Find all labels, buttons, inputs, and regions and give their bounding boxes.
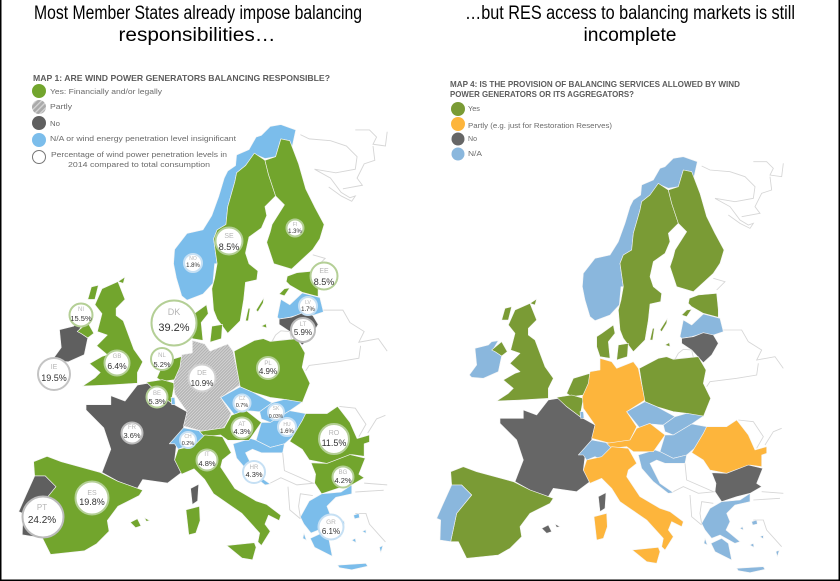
legend: map 4 [450, 79, 740, 160]
region: Italy [175, 435, 281, 560]
region: Iberia [437, 467, 560, 558]
bubble: FR: FR [128, 425, 137, 431]
bubble: LV: 1.7% [301, 307, 315, 313]
bubble: CH: CH [184, 434, 192, 440]
region: British Isles [53, 277, 143, 386]
bubble: FI: FI [293, 222, 297, 228]
legend: map 1: MAP 1: ARE WIND POWER GENERATORS BALANCING RESPONSIBLE? [33, 73, 330, 83]
region: Italy [583, 447, 683, 563]
bubble: SE: 8.5% [219, 242, 239, 252]
legend: map 1: 2014 compared to total consumption [68, 160, 210, 169]
map 4: balancing services allowed [437, 157, 783, 573]
bubble: FI: 1.3% [288, 229, 302, 235]
bubble: CZ: CZ [239, 396, 245, 402]
heading: left [34, 3, 362, 46]
bubble: GR: 6.1% [322, 527, 340, 536]
bubble: IT: 4.8% [198, 459, 216, 468]
bubble: BG: 4.2% [334, 476, 352, 485]
bubble: BG: BG [339, 470, 348, 476]
bubble: LT [291, 318, 315, 342]
bubble: AT: 4.3% [233, 427, 251, 436]
bubble: FR: 3.6% [123, 431, 141, 440]
bubble: BE [146, 386, 168, 408]
bubble: PT: 24.2% [28, 515, 56, 526]
region: Western Europe [86, 356, 199, 505]
bubble: IT [196, 450, 218, 470]
bubble: NI [70, 304, 92, 326]
bubble: GB: 6.4% [107, 361, 127, 371]
bubble: NI: NI [78, 307, 84, 313]
region: Central Europe [578, 357, 711, 493]
heading: left: responsibilities… [118, 25, 276, 46]
legend: map 1: Percentage of wind power penetration levels in [51, 150, 227, 159]
bubble: RO: 11.5% [322, 438, 346, 448]
region: South-East Europe [692, 420, 779, 573]
bubble: PL [257, 357, 279, 379]
region: Central Europe [169, 339, 310, 485]
bubble: HU [278, 418, 296, 436]
bubble: LV [299, 297, 317, 315]
bubble: EE: EE [319, 268, 329, 275]
bubble: DK: 39.2% [158, 322, 190, 334]
region: Baltics [277, 271, 323, 345]
bubble: PT [22, 496, 64, 538]
heading: left: Most Member States already impose balancing [34, 3, 362, 24]
bubble: ES [76, 482, 108, 514]
bubble: BE: BE [153, 391, 161, 397]
bubble: BG [332, 466, 354, 488]
bubble: EE [310, 262, 338, 290]
heading: right [465, 3, 795, 46]
legend: map 1: Partly [50, 102, 72, 111]
bubble: LT: 5.9% [294, 328, 312, 337]
legend: map 4: No [468, 134, 477, 143]
bubble: BE: 5.3% [148, 397, 166, 406]
legend: map 1 [32, 73, 330, 169]
bubble: CZ: 0.7% [236, 403, 248, 409]
bubble: GR [318, 514, 344, 540]
bubble: NI: 15.5% [70, 314, 92, 323]
region: Western Europe [500, 373, 606, 512]
bubble: RO: RO [329, 430, 340, 437]
legend: map 4: POWER GENERATORS OR ITS AGGREGATORS? [450, 89, 634, 99]
bubble: SK [268, 404, 284, 420]
bubble: SK: 0.03% [269, 414, 284, 420]
bubble: NO: 1.8% [186, 263, 200, 269]
legend: map 4: MAP 4: IS THE PROVISION OF BALANCING SERVICES ALLOWED BY WIND [450, 79, 740, 89]
region: British Isles [469, 299, 553, 401]
bubble: EE: 8.5% [314, 277, 334, 287]
bubble: NL: NL [158, 353, 166, 359]
bubble: FI [286, 220, 304, 236]
bubble: IE: 19.5% [41, 373, 67, 383]
bubble: GR: GR [326, 519, 336, 526]
bubble: SK: SK [273, 406, 280, 412]
legend: map 1: Yes: Financially and/or legally [50, 87, 162, 96]
bubble: HR: HR [250, 465, 259, 471]
bubble: NO: NO [189, 256, 197, 262]
bubble: IT: IT [204, 452, 210, 458]
map 1: wind balancing responsibility [19, 125, 387, 570]
region: Baltics [680, 293, 723, 363]
bubble: FR [122, 422, 142, 444]
bubble: PT: PT [37, 503, 47, 512]
legend: map 1: N/A or wind energy penetration level insignificant [50, 134, 237, 143]
bubble: HU: HU [283, 422, 291, 428]
bubble: IE [38, 358, 70, 390]
penetration bubbles: map 1 [22, 220, 354, 540]
bubble: ES: ES [87, 490, 97, 497]
bubble: CH: 0.2% [182, 441, 194, 447]
region: Nordics [582, 157, 724, 360]
bubble: LT: LT [300, 322, 307, 328]
bubble: HR [243, 461, 265, 483]
bubble: DE [188, 364, 216, 392]
bubble: AT [232, 418, 252, 438]
heading: right: incomplete [584, 25, 676, 46]
bubble: RO [319, 424, 349, 454]
bubble: HU: 1.6% [280, 429, 294, 435]
bubble: SE [216, 228, 242, 254]
bubble: AT: AT [238, 422, 246, 428]
bubble: GB [104, 350, 130, 376]
region: South-East Europe [290, 406, 383, 570]
bubble: PL: PL [264, 361, 272, 367]
bubble: ES: 19.8% [79, 497, 105, 507]
bubble: NO [184, 254, 202, 272]
bubble: DE: DE [197, 370, 207, 377]
bubble: CH [180, 432, 196, 448]
bubble: PL: 4.9% [259, 367, 277, 376]
bubble: DK [152, 300, 196, 346]
bubble: SE: SE [224, 233, 234, 240]
legend: map 4: N/A [468, 149, 482, 158]
legend: map 4: Yes [468, 104, 480, 113]
heading: right: …but RES access to balancing markets is still [465, 3, 795, 24]
bubble: DK: DK [168, 307, 180, 317]
bubble: DE: 10.9% [191, 379, 213, 388]
bubble: NL: 5.2% [153, 360, 171, 369]
legend: map 4: Partly (e.g. just for Restoration Reserves) [468, 121, 613, 130]
region: Nordics [174, 125, 324, 342]
bubble: NL [151, 348, 173, 370]
legend: map 1: No [50, 119, 60, 128]
bubble: GB: GB [113, 354, 121, 360]
bubble: LV: LV [305, 300, 312, 306]
region: Iberia [19, 456, 150, 554]
bubble: HR: 4.3% [245, 470, 263, 479]
bubble: IE: IE [51, 364, 58, 371]
bubble: CZ [234, 394, 250, 412]
